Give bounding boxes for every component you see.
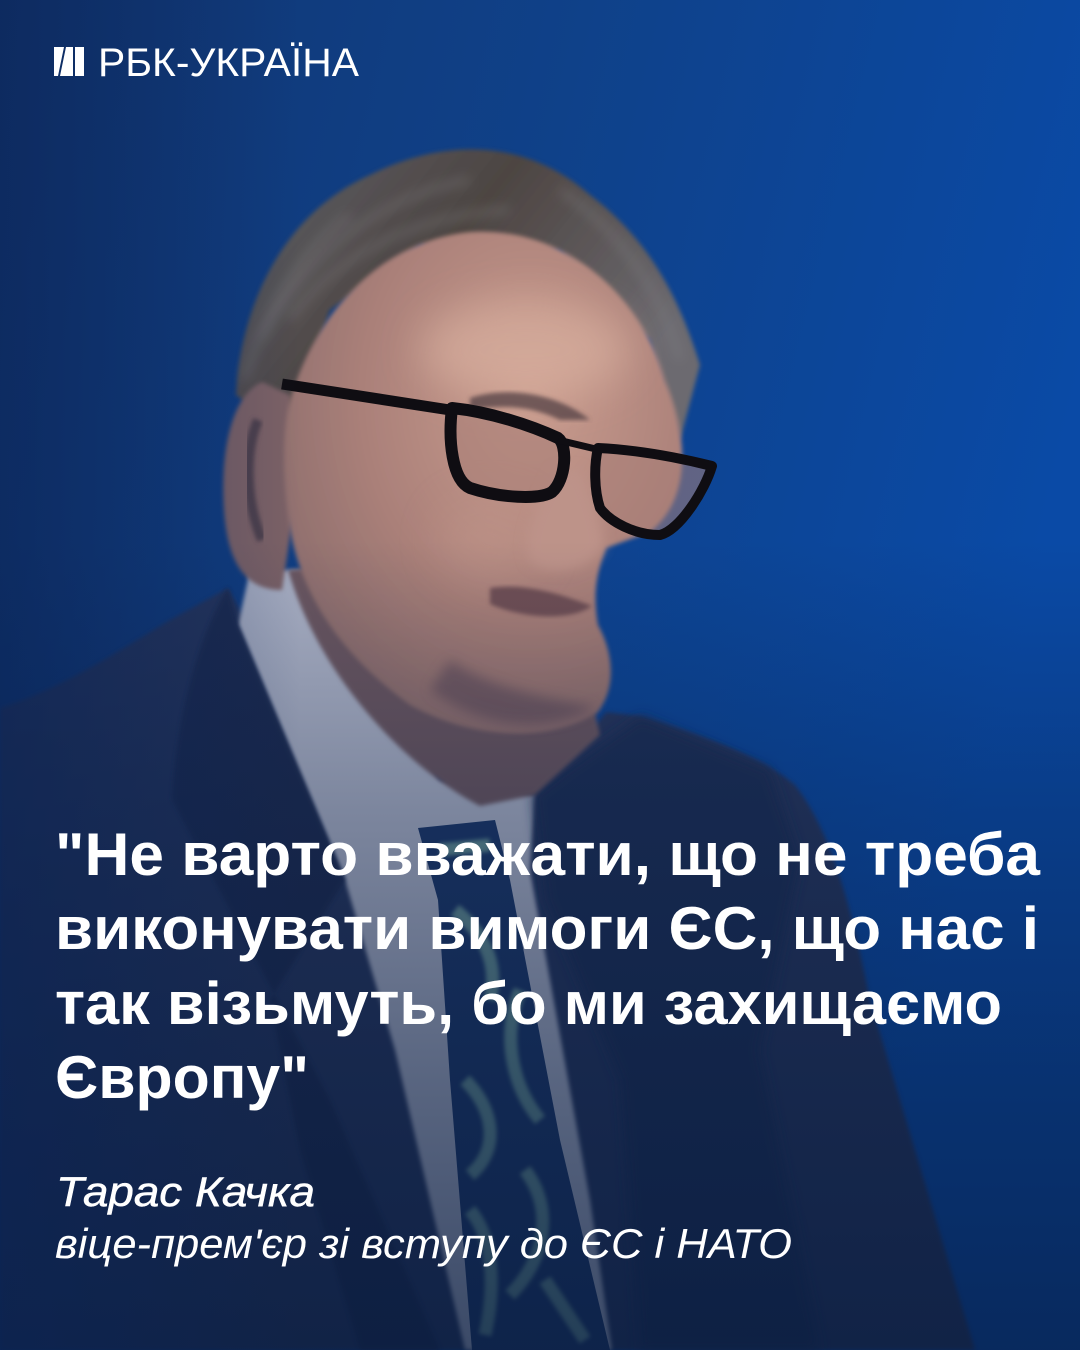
quote heading: виконувати вимоги ЄС, що нас і bbox=[55, 895, 1039, 962]
cheek highlight bbox=[440, 500, 540, 580]
mouth bbox=[490, 587, 592, 616]
logo bbox=[54, 41, 360, 85]
speaker role: віце-прем'єр зі вступу до ЄС і НАТО bbox=[55, 1220, 792, 1267]
nose bbox=[527, 470, 604, 571]
shirt collar bbox=[238, 570, 612, 1350]
hair back bbox=[236, 149, 700, 440]
necktie bbox=[418, 820, 610, 1350]
logo wordmark: РБК-УКРАЇНА bbox=[98, 41, 360, 85]
quote heading bbox=[55, 821, 1041, 1111]
suit jacket bbox=[0, 588, 975, 1350]
eyebrow bbox=[470, 392, 590, 420]
face bbox=[284, 232, 682, 734]
quote heading: "Не варто вважати, що не треба bbox=[55, 821, 1041, 888]
ear bbox=[223, 382, 300, 590]
forehead highlight bbox=[420, 300, 630, 400]
quote heading: Європу" bbox=[55, 1044, 309, 1111]
quote heading: так візьмуть, бо ми захищаємо bbox=[55, 970, 1002, 1037]
neck bbox=[288, 560, 600, 806]
hair strands bbox=[245, 180, 680, 380]
lens tint bbox=[451, 408, 712, 535]
glasses bbox=[282, 384, 712, 535]
chin crease bbox=[430, 660, 596, 724]
icon: logo mark bbox=[54, 47, 84, 76]
speaker name: Тарас Качка bbox=[56, 1168, 315, 1215]
ear inner shadow bbox=[249, 420, 262, 540]
jacket lapels bbox=[172, 588, 440, 1350]
